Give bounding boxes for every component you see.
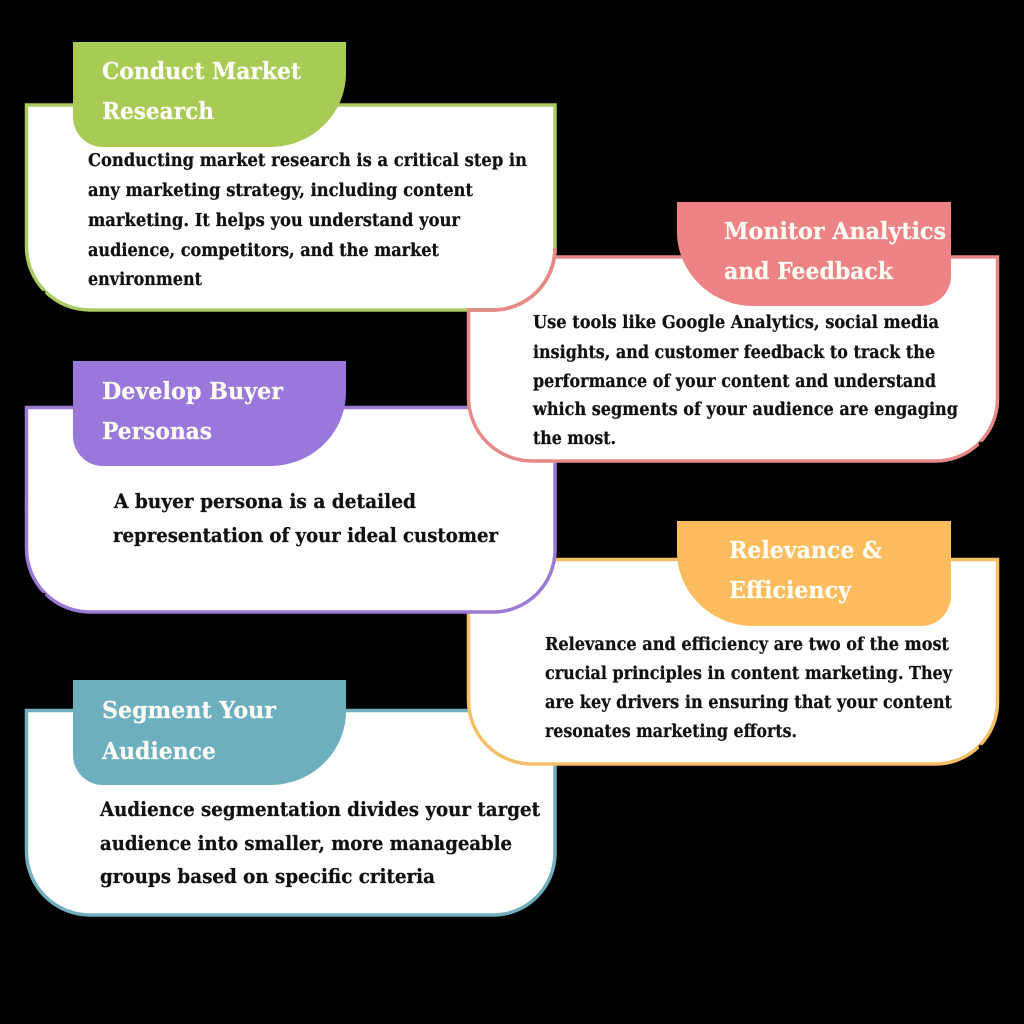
body text [99,798,540,888]
body text: Audience segmentation divides your target [99,798,540,821]
body text: audience into smaller, more manageable [100,832,512,855]
card [26,105,555,310]
body text: the most. [533,429,616,449]
body text: Conducting market research is a critical step in [88,151,527,171]
body text: groups based on specific criteria [100,865,435,888]
tab [677,202,951,306]
body text: representation of your ideal customer [113,524,499,547]
body text: which segments of your audience are engaging [532,400,958,420]
body text: Relevance and efficiency are two of the most [545,635,949,655]
body text: Use tools like Google Analytics, social media [533,313,939,333]
heading: Relevance & [729,537,882,564]
body text: A buyer persona is a detailed [113,490,416,513]
card [468,257,998,461]
body text: audience, competitors, and the market [88,241,439,261]
panel: develop buyer personas [26,361,555,612]
heading: Personas [102,418,212,445]
heading [102,58,301,125]
tab [73,42,346,147]
tab [73,680,346,785]
body text: resonates marketing efforts. [545,722,797,742]
heading [102,378,284,445]
body text [88,151,527,290]
body text: are key drivers in ensuring that your content [545,693,952,713]
tab [677,521,951,626]
heading [724,218,946,285]
tab [73,361,346,466]
body text [532,313,958,449]
card [26,710,555,915]
body text: marketing. It helps you understand your [88,211,461,231]
body text [545,635,953,742]
heading: and Feedback [724,258,894,285]
body text: performance of your content and understand [533,372,936,392]
body text [113,490,499,547]
body text: environment [88,270,202,290]
panel: conduct market research [26,42,555,310]
body text: insights, and customer feedback to track the [533,343,935,363]
card [26,408,555,612]
body text: any marketing strategy, including content [88,181,473,201]
heading: Develop Buyer [102,378,284,405]
card [468,560,998,764]
heading [101,697,277,765]
heading: Efficiency [729,577,852,604]
heading: Segment Your [102,697,277,724]
heading: Research [102,98,214,125]
body text: crucial principles in content marketing. They [545,664,953,684]
heading: Conduct Market [102,58,301,85]
panel: monitor analytics and feedback [468,202,998,461]
heading: Audience [101,738,216,765]
panel: segment your audience [26,680,555,915]
heading: Monitor Analytics [724,218,946,245]
heading [729,537,882,604]
panel: relevance and efficiency [468,521,998,764]
